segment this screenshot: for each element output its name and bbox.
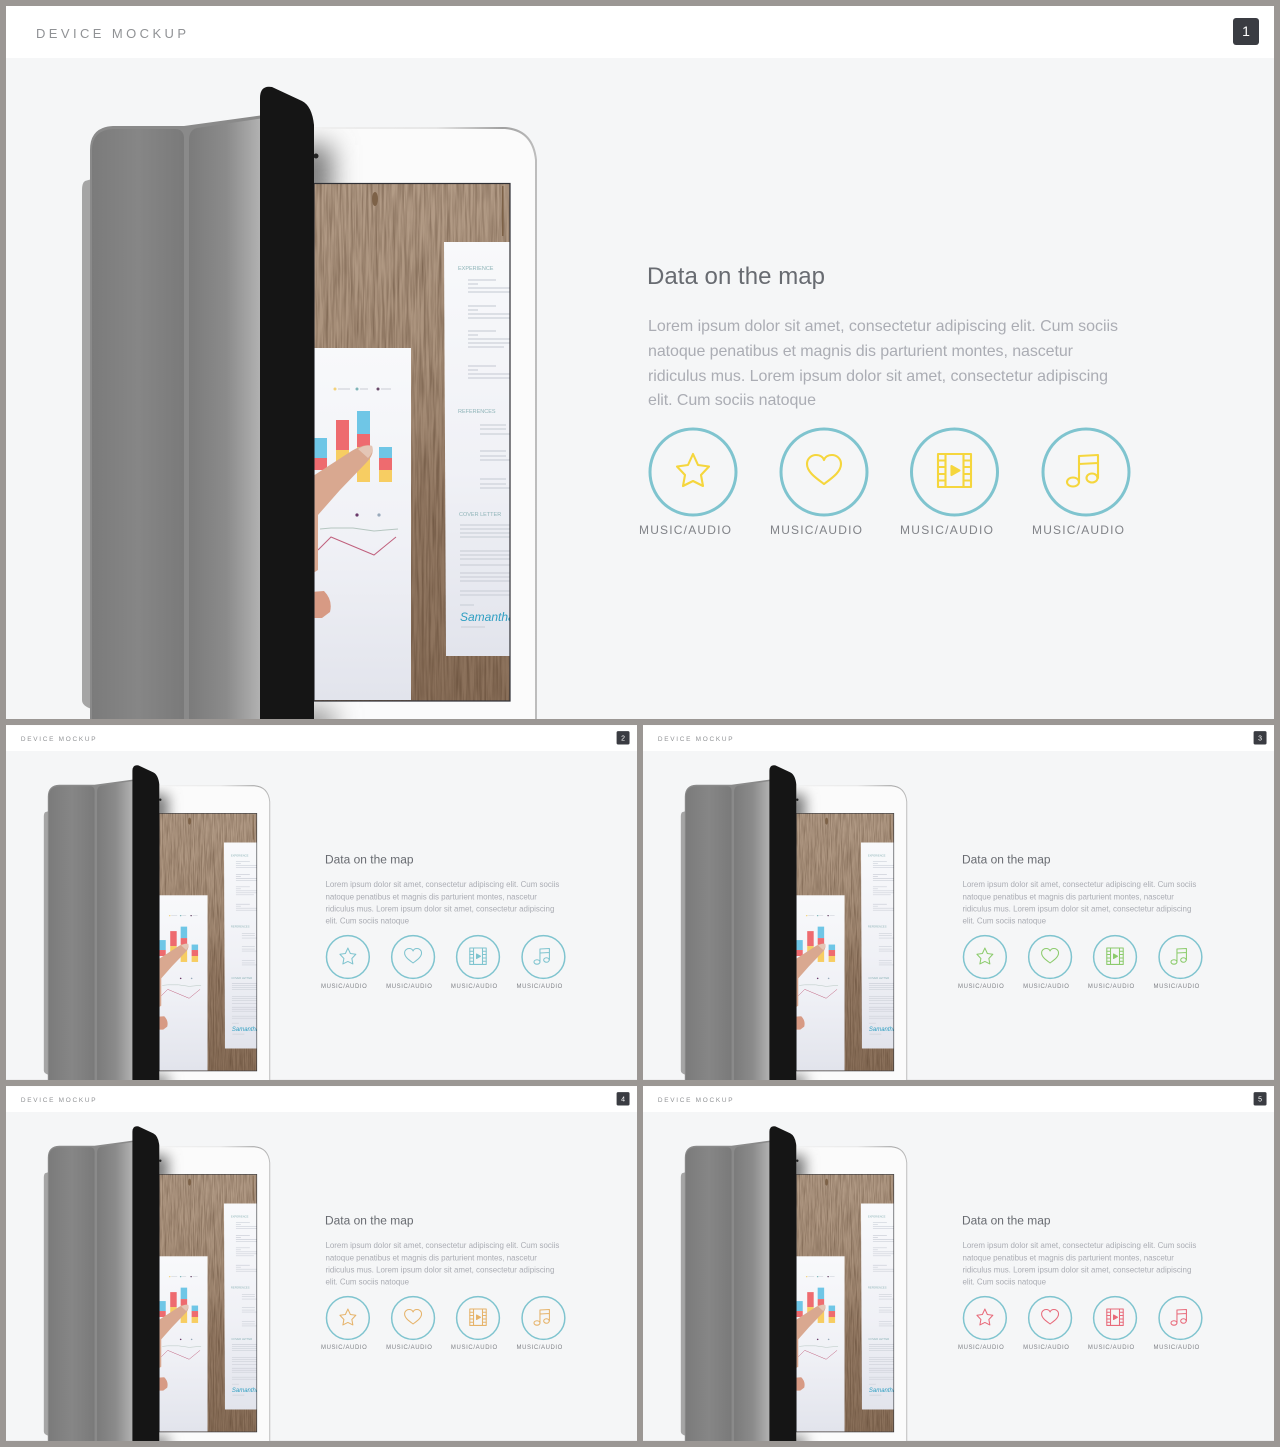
chart legend [334,388,391,390]
resume paper: REFERENCES [458,409,496,415]
description: elit. Cum sociis natoque [648,392,816,409]
text block: Data on the map [325,1213,414,1227]
text block: natoque penatibus et magnis dis parturient montes, nascetur [325,892,537,901]
header bar: DEVICE MOCKUP [658,1097,733,1104]
header bar: 2 [621,736,625,743]
icon row: MUSIC/AUDIO [451,1345,498,1351]
resume paper: COVER LETTER [459,512,501,518]
icon row: MUSIC/AUDIO [517,984,563,990]
device: tablet with folding cover [681,1126,907,1447]
icon row: MUSIC/AUDIO [451,984,498,990]
page number badge: 1 [1242,23,1250,39]
icon row: MUSIC/AUDIO [958,984,1004,990]
icon row [321,1297,565,1351]
screen frame [314,184,510,701]
icon row: MUSIC/AUDIO [1088,984,1135,990]
hand pointing at chart [310,445,373,618]
text block: elit. Cum sociis natoque [962,1278,1047,1287]
header bar: DEVICE MOCKUP [658,736,733,743]
heading: Data on the map [647,263,825,290]
text block: Lorem ipsum dolor sit amet, consectetur adipiscing elit. Cum sociis [325,880,559,889]
icon: star [639,429,736,537]
slide 5: small slide with red icons [643,1086,1274,1441]
icon row: MUSIC/AUDIO [958,1345,1004,1351]
header title: DEVICE MOCKUP [36,26,186,41]
text block: Data on the map [962,852,1051,866]
icon: music notes: MUSIC/AUDIO [1032,523,1124,537]
resume paper [444,242,526,656]
icon row: MUSIC/AUDIO [386,984,432,990]
slide background [6,6,1274,719]
header bar: 4 [621,1097,625,1104]
paper headings: EXPERIENCE [458,266,494,272]
description: ridiculus mus. Lorem ipsum dolor sit amet, consectetur adipiscing [648,368,1108,385]
cover panel left [92,129,184,740]
signature: Samantha S [460,610,526,624]
page number badge [1233,18,1259,45]
icon row [321,936,565,990]
text block: ridiculus mus. Lorem ipsum dolor sit amet, consectetur adipiscing [325,1266,554,1275]
icon row: MUSIC/AUDIO [386,1345,432,1351]
slide background [643,725,1274,1080]
slide background [643,1086,1274,1441]
text block: ridiculus mus. Lorem ipsum dolor sit amet, consectetur adipiscing [962,1266,1191,1275]
text block: elit. Cum sociis natoque [325,917,410,926]
cover panel middle [189,118,264,740]
description [648,318,1118,409]
chart paper [300,348,411,700]
line chart [318,513,398,555]
icon row: MUSIC/AUDIO [1023,984,1069,990]
slide background [6,1086,637,1441]
device: tablet with folding cover [44,1126,270,1447]
text block [325,852,559,926]
icon row: MUSIC/AUDIO [1023,1345,1069,1351]
description: Lorem ipsum dolor sit amet, consectetur adipiscing elit. Cum sociis [648,318,1118,335]
camera dot [314,154,318,158]
text block: elit. Cum sociis natoque [962,917,1047,926]
text block: Data on the map [962,1213,1051,1227]
text block: natoque penatibus et magnis dis parturient montes, nascetur [325,1253,537,1262]
header bar: 5 [1258,1097,1262,1104]
text block: natoque penatibus et magnis dis parturient montes, nascetur [962,1253,1174,1262]
icon: heart: MUSIC/AUDIO [770,523,862,537]
icon: star: MUSIC/AUDIO [639,523,731,537]
icon row: MUSIC/AUDIO [321,1345,367,1351]
device: tablet with folding cover [681,765,907,1094]
header bar [6,1086,637,1112]
device: tablet with folding cover [44,765,270,1094]
icon row [958,936,1202,990]
slide 3: small slide with green icons [643,725,1274,1080]
description: natoque penatibus et magnis dis parturient montes, nascetur [648,343,1074,360]
icon row: MUSIC/AUDIO [321,984,367,990]
icon: heart [770,429,867,537]
cover outline [90,115,264,740]
text block: heading and description [647,263,1118,409]
icon row [639,429,1129,537]
icon row: MUSIC/AUDIO [1088,1345,1135,1351]
icon: film: MUSIC/AUDIO [900,523,993,537]
paper text lines [460,280,510,627]
icon: film [900,429,998,537]
icon row: MUSIC/AUDIO [1154,984,1200,990]
text block [962,1213,1196,1287]
slide 2: small slide with teal icons [6,725,637,1080]
header bar [643,725,1274,751]
icon row: MUSIC/AUDIO [517,1345,563,1351]
text block: Lorem ipsum dolor sit amet, consectetur adipiscing elit. Cum sociis [325,1241,559,1250]
header bar [643,1086,1274,1112]
text block: natoque penatibus et magnis dis parturient montes, nascetur [962,892,1174,901]
cover shadow on bezel [290,145,334,748]
text block [962,852,1196,926]
icon row: MUSIC/AUDIO [1154,1345,1200,1351]
header bar [6,725,637,751]
header bar: DEVICE MOCKUP [21,1097,96,1104]
black front flap [260,87,314,740]
slide background [6,725,637,1080]
tablet screen with wood photo [300,183,526,701]
text block: Lorem ipsum dolor sit amet, consectetur adipiscing elit. Cum sociis [962,880,1196,889]
tablet body [300,128,536,740]
icon: music notes [1032,429,1129,537]
header bar: DEVICE MOCKUP [21,736,96,743]
text block: Lorem ipsum dolor sit amet, consectetur adipiscing elit. Cum sociis [962,1241,1196,1250]
text block: Data on the map [325,852,414,866]
cover back strip [82,179,92,709]
text block [325,1213,559,1287]
icon row [958,1297,1202,1351]
slide 4: small slide with orange icons [6,1086,637,1441]
header bar: 3 [1258,736,1262,743]
text block: ridiculus mus. Lorem ipsum dolor sit amet, consectetur adipiscing [962,905,1191,914]
header bar [6,6,1274,58]
device: tablet with folding cover [82,87,536,748]
slide 1: large device mockup slide [6,6,1274,719]
text block: ridiculus mus. Lorem ipsum dolor sit amet, consectetur adipiscing [325,905,554,914]
text block: elit. Cum sociis natoque [325,1278,410,1287]
stacked bar chart [314,411,392,482]
